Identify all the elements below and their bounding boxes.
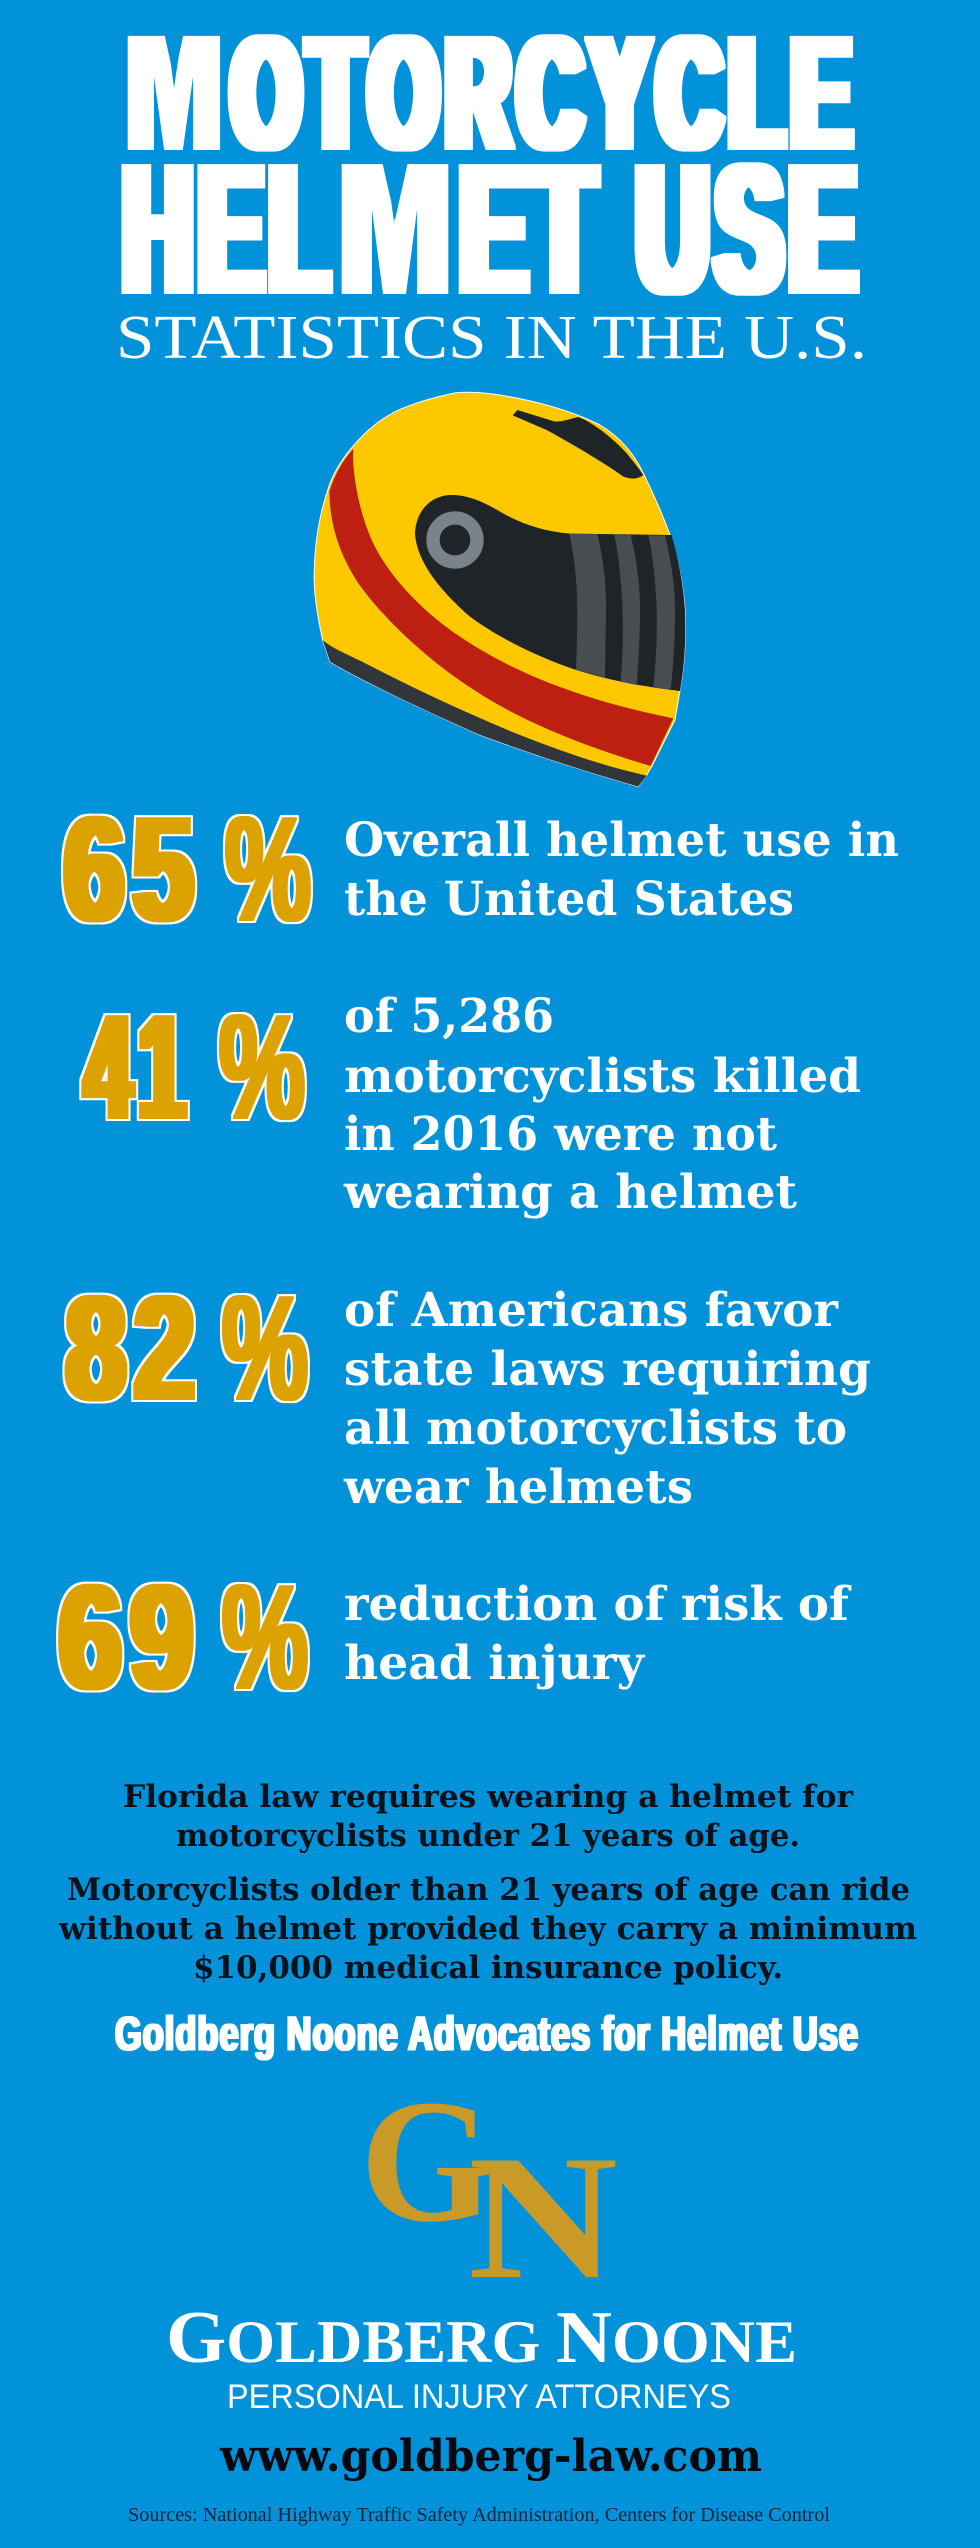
title xyxy=(123,3,863,331)
description xyxy=(344,813,899,927)
description: head injury xyxy=(344,1636,646,1691)
description xyxy=(343,989,861,1220)
sources: Sources: National Highway Traffic Safety Administration, Centers for Disease Control xyxy=(128,2504,830,2526)
text block: Florida law: motorcyclists under 21 years of age. xyxy=(176,1818,800,1854)
visor pivot ring xyxy=(433,518,477,562)
title: M xyxy=(128,3,219,182)
percent sign: % xyxy=(225,787,311,952)
percent sign: % xyxy=(219,985,305,1150)
icon: motorcycle helmet xyxy=(314,392,685,787)
visor stripes xyxy=(569,534,675,690)
subtitle: STATISTICS IN THE U.S. xyxy=(116,304,867,372)
number 41: 41 xyxy=(85,985,192,1150)
percent sign: % xyxy=(222,1555,308,1720)
description: of 5,286 xyxy=(344,989,554,1044)
stat: 41 percent xyxy=(85,985,861,1220)
description: wearing a helmet xyxy=(343,1165,797,1220)
visor xyxy=(415,495,685,691)
stat: 69 percent xyxy=(59,1555,852,1720)
title: HEL xyxy=(123,126,335,331)
description: in 2016 were not xyxy=(344,1107,777,1162)
description xyxy=(343,1283,871,1515)
description: the United States xyxy=(344,872,794,927)
number 82: 82 xyxy=(66,1266,203,1431)
description: reduction of risk of xyxy=(344,1577,852,1632)
description: wear helmets xyxy=(343,1460,693,1515)
red racing stripe xyxy=(329,449,673,766)
text block: Florida law xyxy=(123,1779,854,1854)
number 65: 65 xyxy=(64,787,202,952)
description: Overall helmet use in xyxy=(344,813,899,868)
top vent xyxy=(513,410,643,478)
firm name: GOLDBERG NOONE xyxy=(166,2297,797,2379)
number 69: 69 xyxy=(59,1555,202,1720)
text block: Florida law: Florida law requires wearing a helmet for xyxy=(123,1779,854,1815)
description: motorcyclists killed xyxy=(344,1049,861,1104)
logo: GN monogram: N xyxy=(468,2118,618,2316)
text block: insurance exception: without a helmet provided they carry a minimum xyxy=(58,1911,917,1947)
description: of Americans favor xyxy=(344,1283,839,1338)
text block: insurance exception: $10,000 medical insurance policy. xyxy=(193,1950,783,1986)
website: www.goldberg-law.com xyxy=(219,2431,762,2482)
text block: insurance exception: Motorcyclists older than 21 years of age can ride xyxy=(67,1872,910,1908)
logo: GN monogram: G xyxy=(360,2064,494,2259)
logo: GN monogram xyxy=(360,2064,618,2316)
helmet shell xyxy=(314,392,685,787)
tagline: PERSONAL INJURY ATTORNEYS xyxy=(227,2378,731,2416)
text block: insurance exception xyxy=(58,1872,917,1986)
description xyxy=(344,1577,852,1691)
stat: 65 percent xyxy=(64,787,899,952)
description: all motorcyclists to xyxy=(344,1401,847,1456)
title: M xyxy=(341,126,449,331)
helmet bottom trim xyxy=(323,640,647,787)
percent sign: % xyxy=(222,1266,308,1431)
stat: 82 percent xyxy=(66,1266,871,1515)
description: state laws requiring xyxy=(344,1342,871,1397)
